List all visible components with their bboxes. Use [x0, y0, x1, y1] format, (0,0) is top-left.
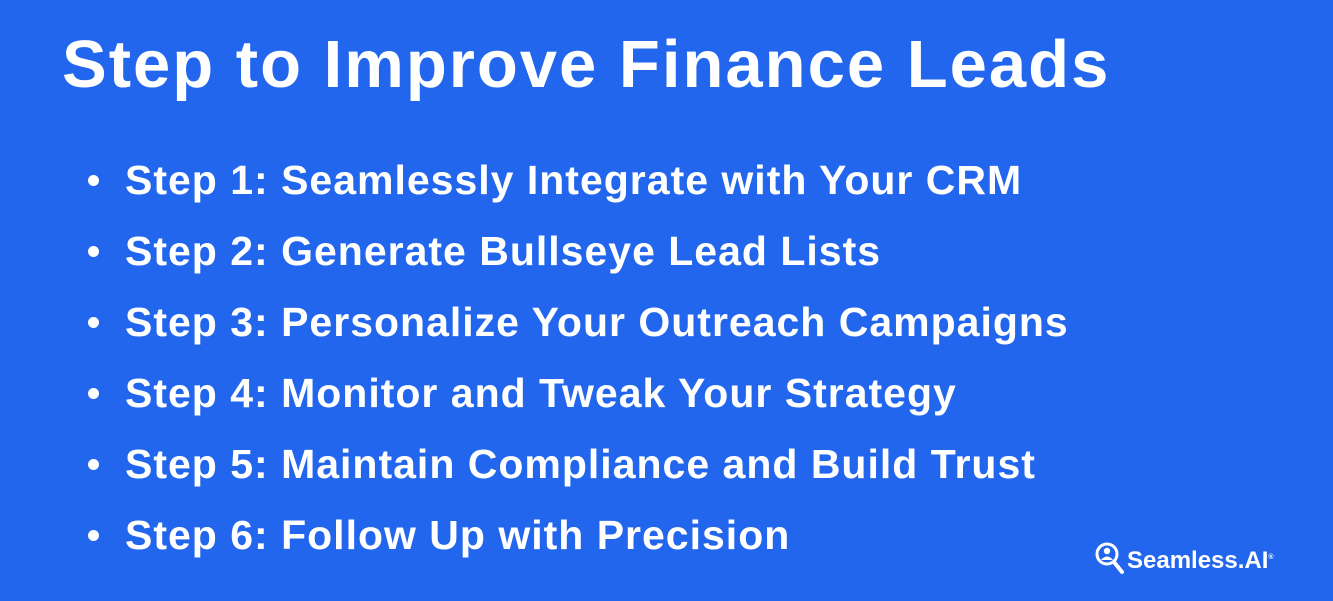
- step 3: Step 3: Personalize Your Outreach Campaigns: [125, 299, 1069, 345]
- logo: Seamless.AI: [1096, 542, 1274, 574]
- step 5: Step 5: Maintain Compliance and Build Trust: [125, 441, 1036, 487]
- icon: magnifier: [1096, 542, 1124, 574]
- title: Step to Improve Finance Leads: [62, 27, 1110, 102]
- step 1: Step 1: Seamlessly Integrate with Your CRM: [125, 157, 1022, 203]
- step 2: Step 2: Generate Bullseye Lead Lists: [125, 228, 881, 274]
- step 4: Step 4: Monitor and Tweak Your Strategy: [125, 370, 957, 416]
- bullet list: steps: [88, 157, 1069, 558]
- logo: Seamless.AI: Seamless.AI®: [1127, 547, 1274, 574]
- step 6: Step 6: Follow Up with Precision: [125, 512, 790, 558]
